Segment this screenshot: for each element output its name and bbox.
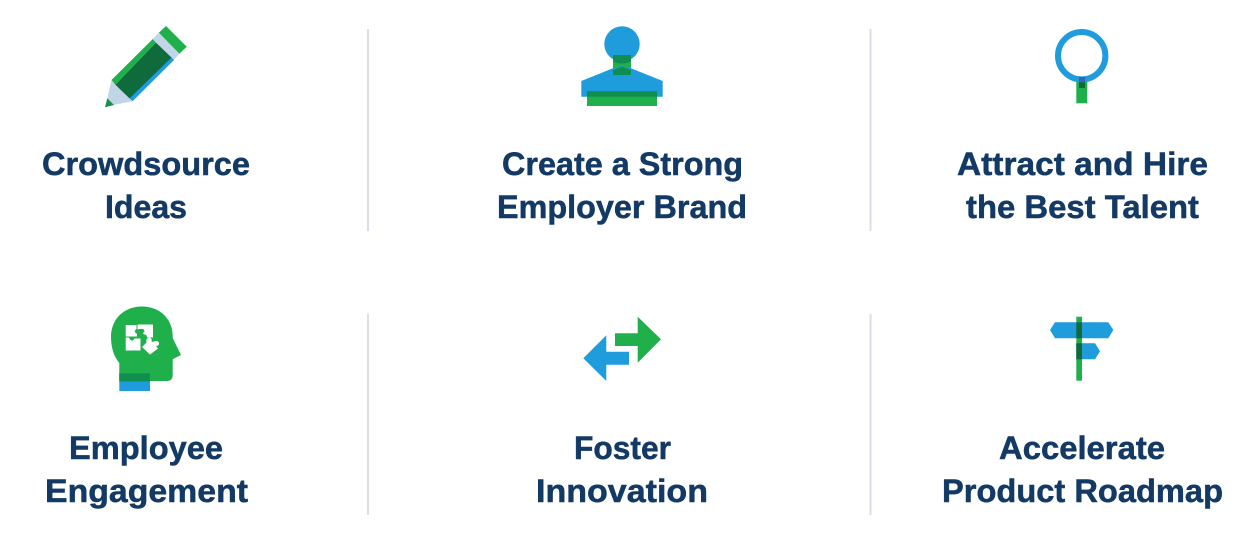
heading: Crowdsource Ideas: Crowdsource xyxy=(42,146,250,182)
heading: Create a Strong Employer Brand: Create a Strong xyxy=(502,146,743,182)
heading: Create a Strong Employer Brand xyxy=(497,146,747,225)
heading: Attract and Hire the Best Talent: the Best Talent xyxy=(966,189,1199,225)
icon detail: puzzle pieces xyxy=(126,324,159,354)
heading: Employee Engagement: Engagement xyxy=(45,473,248,509)
heading: Create a Strong Employer Brand: Employer Brand xyxy=(497,189,747,225)
panel: Accelerate Product Roadmap xyxy=(942,317,1223,509)
heading: Accelerate Product Roadmap: Accelerate xyxy=(999,430,1165,466)
heading: Foster Innovation: Innovation xyxy=(536,473,708,509)
heading: Employee Engagement: Employee xyxy=(69,430,223,466)
icon: pencil xyxy=(105,26,187,107)
heading: Employee Engagement xyxy=(45,430,248,509)
panel: Employee Engagement xyxy=(45,306,248,509)
icon: signpost xyxy=(1050,317,1113,381)
heading: Crowdsource Ideas xyxy=(42,146,250,225)
heading: Foster Innovation: Foster xyxy=(574,430,671,466)
heading: Accelerate Product Roadmap: Product Roadmap xyxy=(942,473,1223,509)
icon: magnifying glass xyxy=(1058,32,1105,103)
panel: Crowdsource Ideas xyxy=(42,26,250,225)
heading: Attract and Hire the Best Talent: Attract and Hire xyxy=(957,146,1208,182)
heading: Accelerate Product Roadmap xyxy=(942,430,1223,509)
icon: exchange arrows xyxy=(583,317,661,381)
icon: head with puzzle xyxy=(111,306,181,391)
icon: stamp xyxy=(581,26,663,106)
heading: Foster Innovation xyxy=(536,430,708,509)
panel: Foster Innovation xyxy=(536,317,708,509)
panel: Create a Strong Employer Brand xyxy=(497,26,747,225)
panel: Attract and Hire the Best Talent xyxy=(957,32,1208,225)
heading: Attract and Hire the Best Talent xyxy=(957,146,1208,225)
heading: Crowdsource Ideas: Ideas xyxy=(105,189,187,225)
